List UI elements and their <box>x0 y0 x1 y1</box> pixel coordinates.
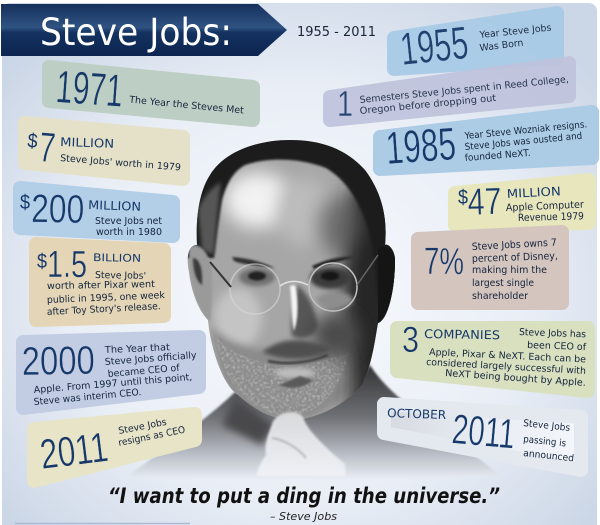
panel: 1971: 1971 <box>54 60 125 117</box>
panel: $7 million: MILLION <box>60 135 114 151</box>
panel: $200 million <box>20 187 173 238</box>
panel: 7%: largest single <box>472 278 534 289</box>
eyes <box>248 272 266 280</box>
panel: 1985: Steve Jobs was ousted and <box>464 131 583 153</box>
panel: $1.5 billion: 1.5 <box>47 244 87 286</box>
panel: 7% <box>418 232 562 303</box>
panel: $47 million: Revenue 1979 <box>518 211 584 224</box>
right face shadow <box>343 185 400 420</box>
panel: 1985: Year Steve Wozniak resigns. <box>463 119 588 142</box>
panel: $1.5 billion: $ <box>37 251 47 273</box>
panel: $7 million <box>25 123 183 179</box>
panel: $7 million: Steve Jobs' worth in 1979 <box>60 153 181 173</box>
panel: $47 million: Apple Computer <box>506 200 585 214</box>
panel: $47 million: 47 <box>467 181 502 224</box>
panel: october 2011 <box>384 404 581 470</box>
quote: “I want to put a ding in the universe.” <box>108 484 500 508</box>
panel: 2000 <box>21 337 199 408</box>
panel: 1 semester: 1 <box>337 83 353 124</box>
eyebrows <box>232 257 275 268</box>
panel: 3 companies <box>397 319 588 391</box>
panel: $1.5 billion <box>36 244 166 320</box>
panel: $7 million: $ <box>27 130 38 153</box>
panel: 7%: making him the <box>472 265 547 276</box>
panel: $47 million: $ <box>458 187 468 209</box>
panel: october 2011: 2011 <box>450 405 517 457</box>
left ear <box>189 245 212 322</box>
hand <box>256 412 346 476</box>
panel: $1.5 billion: worth after Pixar went <box>47 279 155 292</box>
panel: 1985: 1985 <box>384 117 458 174</box>
panel: 7%: shareholder <box>472 291 529 302</box>
mouth and moustache <box>262 340 332 359</box>
panel: october 2011: announced <box>523 448 575 464</box>
nose <box>291 285 318 338</box>
panel: 1 semester <box>330 63 569 124</box>
glasses <box>210 255 378 314</box>
panel: $200 million: $ <box>20 192 30 214</box>
panel: 1971 <box>49 60 253 120</box>
panel: 3 companies: 3 <box>402 319 419 360</box>
banner <box>1 4 287 56</box>
panel: 2000: 2000 <box>21 339 95 384</box>
panel: 7%: percent of Disney, <box>472 251 558 265</box>
left cheek <box>214 288 262 348</box>
panel: $47 million: MILLION <box>506 184 561 201</box>
panel: 1955: Was Born <box>479 38 524 54</box>
panel: $7 million: 7 <box>37 123 57 171</box>
panel: 1955: Year Steve Jobs <box>478 23 552 41</box>
right ear <box>378 261 395 323</box>
panel: 3 companies: NeXT being bought by Apple. <box>445 368 586 389</box>
panel: 2000: Apple. From 1997 until this point, <box>33 372 193 396</box>
panel: 2000: Steve Jobs officially <box>104 350 197 368</box>
title: Steve Jobs: <box>40 11 232 54</box>
panel: 2011 resigns <box>34 414 195 481</box>
panel: $1.5 billion: Steve Jobs' <box>95 270 146 282</box>
panel: october 2011: Steve Jobs <box>523 418 571 434</box>
panel: 1971: The Year the Steves Met <box>128 94 245 117</box>
panel: $1.5 billion: BILLION <box>93 252 141 265</box>
hair <box>185 138 400 320</box>
panel: 2011 resigns: Steve Jobs <box>117 417 168 437</box>
panel: 2011 resigns: 2011 <box>37 423 111 478</box>
panel: 1955: 1955 <box>398 16 471 75</box>
panel: 3 companies: considered largely successful with <box>426 357 586 377</box>
panel: $200 million: 200 <box>31 187 85 232</box>
panel: 1 semester: Oregon before dropping out <box>359 93 497 117</box>
panel: 2000: became CEO of <box>107 363 181 380</box>
panel: $200 million: worth in 1980 <box>96 227 162 238</box>
panel: october 2011: OCTOBER <box>387 406 446 422</box>
panel: 3 companies: Steve Jobs has <box>519 327 586 340</box>
forehead shading <box>224 172 292 228</box>
panel: $1.5 billion: after Toy Story's release. <box>47 301 161 318</box>
panel: 3 companies: been CEO of <box>527 340 587 353</box>
panel: $200 million: Steve Jobs net <box>95 216 162 227</box>
shirt and shoulders <box>128 365 500 479</box>
panel: 7%: Steve Jobs owns 7 <box>472 238 557 253</box>
panel: $47 million <box>455 180 589 225</box>
panel: $1.5 billion: public in 1995, one week <box>47 290 166 306</box>
panel: $200 million: MILLION <box>88 198 141 214</box>
neck shadow <box>222 398 275 445</box>
panel: 7%: 7% <box>424 241 464 283</box>
date range: 1955 - 2011 <box>297 25 376 40</box>
panel: 2000: Steve was interim CEO. <box>33 387 142 408</box>
beard <box>210 328 355 418</box>
head <box>185 138 400 423</box>
panel: 1985 <box>380 112 592 174</box>
panel: 3 companies: Apple, Pixar & NeXT. Each can be <box>429 347 586 365</box>
quote attribution: – Steve Jobs <box>270 511 338 523</box>
panel: 1955 <box>394 13 557 75</box>
eye sockets <box>239 268 275 286</box>
panel: 1985: founded NeXT. <box>464 148 531 164</box>
panel: 2000: The Year that <box>104 342 170 356</box>
portrait photo <box>128 138 500 479</box>
panel: october 2011: passing is <box>523 434 567 449</box>
panel: 1 semester: Semesters Steve Jobs spent in Reed College, <box>359 74 569 106</box>
panel: 2011 resigns: resigns as CEO <box>117 425 186 449</box>
panel: 3 companies: COMPANIES <box>424 327 500 342</box>
